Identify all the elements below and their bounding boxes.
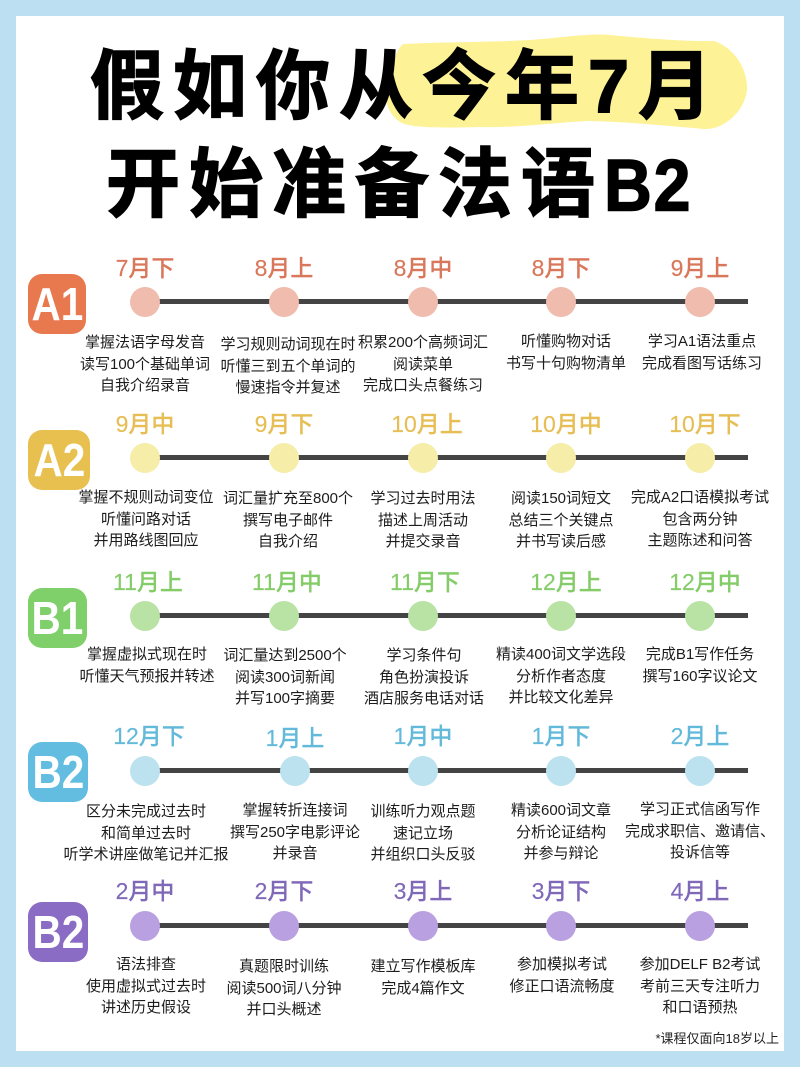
milestone: 1月上: 并录音 — [272, 845, 318, 862]
milestone: 10月下 — [631, 411, 769, 549]
milestone: 7月下 — [80, 255, 210, 394]
row: B1 — [28, 569, 758, 707]
title highlight — [386, 34, 748, 129]
milestone: 3月上: 3月上 — [394, 878, 452, 904]
milestone: 1月下 — [511, 723, 611, 862]
milestone: 1月下: 分析论证结构 — [516, 824, 606, 841]
badge: B2: B2 — [32, 906, 84, 958]
milestone: 3月上 — [370, 878, 476, 997]
milestone: 8月上: 慢速指令并复述 — [235, 379, 340, 396]
milestone: 1月上 — [230, 725, 360, 862]
badge: A2: A2 — [33, 434, 85, 486]
milestone: 11月下: 学习条件句 — [386, 647, 462, 664]
milestone: 4月上: 考前三天专注听力 — [640, 978, 760, 995]
badge: B2: B2 — [32, 746, 84, 798]
milestone: 12月上: 精读400词文学选段 — [496, 646, 626, 663]
milestone: 2月上 — [625, 723, 775, 861]
milestone: 8月中: 阅读菜单 — [393, 356, 453, 373]
milestone: 9月上 — [642, 255, 762, 372]
row: A1 — [28, 255, 762, 396]
milestone: 11月中: 并写100字摘要 — [235, 690, 335, 707]
milestone: 9月上: 学习A1语法重点 — [648, 333, 756, 350]
milestone: 2月中: 讲述历史假设 — [101, 999, 191, 1016]
footnote: *课程仅面向18岁以上 — [655, 1031, 779, 1046]
timeline line — [145, 613, 748, 618]
milestone: 2月上: 学习正式信函写作 — [640, 801, 760, 818]
milestone: 2月上: 2月上 — [671, 723, 729, 749]
milestone: 9月中: 掌握不规则动词变位 — [78, 489, 214, 506]
title line 2: B2 — [604, 145, 692, 227]
milestone: 9月中: 并用路线图回应 — [93, 532, 198, 549]
milestone: 11月上 — [79, 569, 214, 685]
milestone: 10月上: 并提交录音 — [385, 533, 460, 550]
milestone: 10月下: 10月下 — [669, 411, 741, 437]
milestone: 1月上: 1月上 — [266, 725, 324, 751]
milestone: 8月上 — [220, 255, 356, 396]
milestone: 2月下: 阅读500词八分钟 — [226, 980, 342, 997]
milestone: 1月中: 训练听力观点题 — [370, 803, 476, 820]
milestone: 12月上: 分析作者态度 — [516, 668, 606, 685]
row: B2 purple — [28, 878, 760, 1018]
badge: A1: A1 — [32, 278, 83, 330]
milestone: 11月下: 11月下 — [390, 569, 460, 595]
milestone: 1月中: 并组织口头反驳 — [370, 846, 476, 863]
milestone: 1月上: 撰写250字电影评论 — [230, 824, 360, 841]
milestone: 3月下 — [509, 878, 614, 995]
milestone: 2月上: 完成求职信、邀请信、 — [625, 823, 775, 840]
milestone: 12月下 — [63, 723, 228, 863]
milestone: 2月下: 2月下 — [255, 878, 313, 904]
milestone: 10月上: 描述上周活动 — [378, 512, 468, 529]
milestone: 9月下: 词汇量扩充至800个 — [223, 490, 353, 507]
milestone: 8月中: 积累200个高频词汇 — [358, 334, 488, 351]
milestone: 2月下: 真题限时训练 — [239, 958, 329, 975]
milestone: 4月上: 参加DELF B2考试 — [640, 956, 760, 973]
milestone: 8月下 — [506, 255, 626, 372]
milestone: 11月中: 词汇量达到2500个 — [223, 647, 347, 664]
timeline line — [145, 923, 748, 928]
milestone: 9月下 — [223, 411, 353, 550]
milestone: 2月中: 使用虚拟式过去时 — [86, 978, 206, 995]
milestone: 12月上 — [496, 569, 626, 706]
milestone: 7月下: 自我介绍录音 — [100, 377, 190, 394]
milestone: 11月下: 酒店服务电话对话 — [364, 690, 484, 707]
milestone: 9月下: 9月下 — [255, 411, 313, 437]
milestone: 1月下: 并参与辩论 — [523, 845, 598, 862]
milestone: 3月上: 建立写作模板库 — [370, 958, 476, 975]
milestone: 2月下 — [226, 878, 342, 1018]
milestone: 2月下: 并口头概述 — [246, 1001, 322, 1018]
milestone: 12月中: 12月中 — [669, 569, 741, 595]
milestone: 11月下 — [364, 569, 484, 707]
milestone: 8月上: 听懂三到五个单词的 — [220, 358, 356, 375]
milestone: 10月中: 阅读150词短文 — [511, 490, 611, 507]
milestone: 3月下: 3月下 — [532, 878, 590, 904]
milestone: 8月下: 8月下 — [532, 255, 590, 281]
milestone: 12月上: 并比较文化差异 — [508, 689, 614, 706]
milestone: 12月中: 撰写160字议论文 — [642, 668, 758, 685]
title line 2: 开始准备法语 — [106, 142, 604, 227]
milestone: 10月中: 10月中 — [530, 411, 602, 437]
milestone: 4月上: 4月上 — [671, 878, 729, 904]
milestone: 12月下: 区分未完成过去时 — [86, 803, 206, 820]
milestone: 7月下: 7月下 — [116, 255, 174, 281]
milestone: 10月下: 包含两分钟 — [662, 511, 738, 528]
milestone: 12月下: 和简单过去时 — [101, 825, 191, 842]
milestone: 12月中: 完成B1写作任务 — [646, 646, 754, 663]
milestone: 8月下: 听懂购物对话 — [521, 333, 611, 350]
milestone: 1月中: 1月中 — [394, 723, 452, 749]
milestone: 8月中 — [358, 255, 488, 394]
milestone: 10月上 — [370, 411, 476, 550]
milestone: 11月中: 阅读300词新闻 — [235, 669, 335, 686]
milestone: 9月上: 完成看图写话练习 — [642, 355, 762, 372]
milestone: 10月上: 学习过去时用法 — [370, 490, 476, 507]
milestone: 10月下: 主题陈述和问答 — [647, 532, 752, 549]
milestone: 10月中: 并书写读后感 — [516, 533, 606, 550]
timeline line — [145, 455, 748, 460]
milestone: 8月上: 8月上 — [255, 255, 313, 281]
badge: B1: B1 — [32, 592, 83, 644]
milestone: 1月下: 精读600词文章 — [511, 802, 611, 819]
milestone: 3月下: 参加模拟考试 — [517, 956, 607, 973]
milestone: 9月下: 撰写电子邮件 — [243, 512, 333, 529]
milestone: 9月中: 9月中 — [116, 411, 174, 437]
timeline line — [145, 768, 748, 773]
milestone: 9月下: 自我介绍 — [258, 533, 318, 550]
milestone: 2月中 — [86, 878, 206, 1016]
milestone: 2月上: 投诉信等 — [670, 844, 730, 861]
milestone: 2月中: 2月中 — [116, 878, 174, 904]
row: B2 blue — [28, 723, 775, 863]
milestone: 12月中 — [642, 569, 758, 685]
milestone: 9月上: 9月上 — [671, 255, 729, 281]
row: A2 — [28, 411, 769, 550]
milestone: 11月上: 听懂天气预报并转述 — [79, 668, 214, 685]
milestone: 1月中: 速记立场 — [393, 825, 453, 842]
title line 1: 假如你从今年7月 — [90, 44, 721, 129]
milestone: 2月中: 语法排查 — [116, 956, 176, 973]
milestone: 11月下: 角色扮演投诉 — [379, 669, 469, 686]
milestone: 10月上: 10月上 — [391, 411, 463, 437]
timeline line — [145, 299, 748, 304]
milestone: 11月中 — [223, 569, 347, 707]
milestone: 9月中 — [78, 411, 214, 549]
milestone: 9月中: 听懂问路对话 — [101, 511, 191, 528]
milestone: 8月中: 8月中 — [394, 255, 452, 281]
milestone: 8月下: 书写十句购物清单 — [506, 355, 626, 372]
milestone: 12月下: 12月下 — [113, 723, 185, 749]
milestone: 10月中: 总结三个关键点 — [508, 512, 614, 529]
milestone: 8月中: 完成口头点餐练习 — [363, 377, 483, 394]
milestone: 10月中 — [508, 411, 614, 550]
milestone: 1月下: 1月下 — [532, 723, 590, 749]
milestone: 3月下: 修正口语流畅度 — [509, 978, 614, 995]
milestone: 12月下: 听学术讲座做笔记并汇报 — [63, 846, 228, 863]
milestone: 8月上: 学习规则动词现在时 — [220, 336, 356, 353]
milestone: 1月中 — [370, 723, 476, 863]
milestone: 10月下: 完成A2口语模拟考试 — [631, 489, 769, 506]
milestone: 11月上: 11月上 — [113, 569, 183, 595]
milestone: 4月上: 和口语预热 — [662, 999, 738, 1016]
milestone: 11月上: 掌握虚拟式现在时 — [87, 646, 207, 663]
milestone: 11月中: 11月中 — [252, 569, 322, 595]
milestone: 7月下: 读写100个基础单词 — [80, 356, 210, 373]
milestone: 12月上: 12月上 — [530, 569, 602, 595]
milestone: 1月上: 掌握转折连接词 — [242, 802, 348, 819]
milestone: 4月上 — [640, 878, 760, 1016]
milestone: 3月上: 完成4篇作文 — [381, 980, 465, 997]
milestone: 7月下: 掌握法语字母发音 — [85, 334, 205, 351]
